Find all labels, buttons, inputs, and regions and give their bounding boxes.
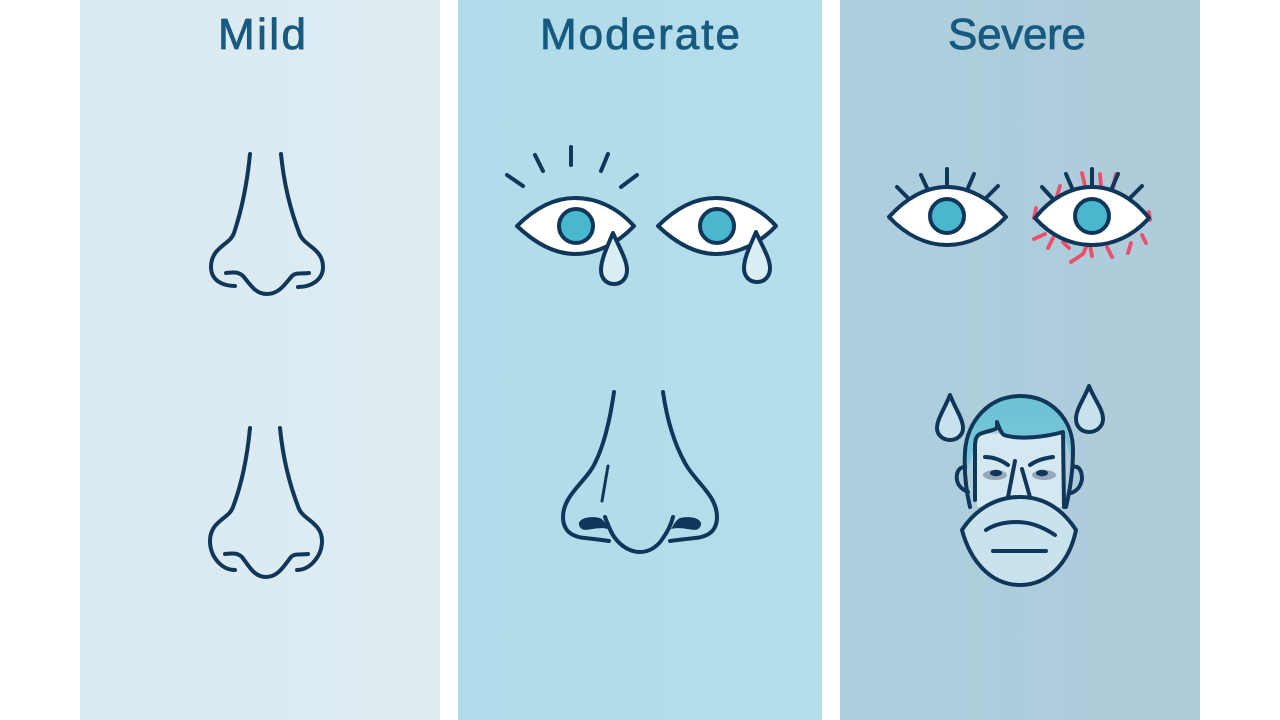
icon: mask xyxy=(962,497,1076,585)
heading: Mild: Mild xyxy=(218,10,306,59)
icon: lower nose xyxy=(210,428,322,577)
icon: face xyxy=(975,432,1064,507)
icon: tear xyxy=(601,233,627,284)
icon: tear xyxy=(744,232,770,282)
icon: hairline xyxy=(975,422,1064,507)
icon: ears xyxy=(957,467,968,492)
icon: irritation rays xyxy=(507,147,637,187)
icon: right sweat drop xyxy=(1076,386,1103,432)
icon: upper nose xyxy=(211,154,323,294)
icon: hair xyxy=(967,398,1071,470)
icon: head outline xyxy=(965,396,1073,507)
heading: Severe: Severe xyxy=(948,10,1086,59)
icon: left watery eye xyxy=(517,198,634,284)
icon: left sweat drop xyxy=(937,395,963,440)
panel: moderate xyxy=(458,0,822,720)
icon: sweating face with mask xyxy=(937,386,1103,585)
heading: Moderate: Moderate xyxy=(540,10,740,59)
panel: mild xyxy=(80,0,440,720)
panel: severe xyxy=(840,0,1200,720)
icon: left eye with lashes xyxy=(889,169,1006,245)
icon: right watery eye xyxy=(658,198,776,282)
icon: brows and eyes xyxy=(983,457,1056,497)
icon: red veins xyxy=(1034,173,1150,262)
icon: enlarged nose xyxy=(563,392,717,552)
icon: red irritated eye xyxy=(1034,169,1150,262)
